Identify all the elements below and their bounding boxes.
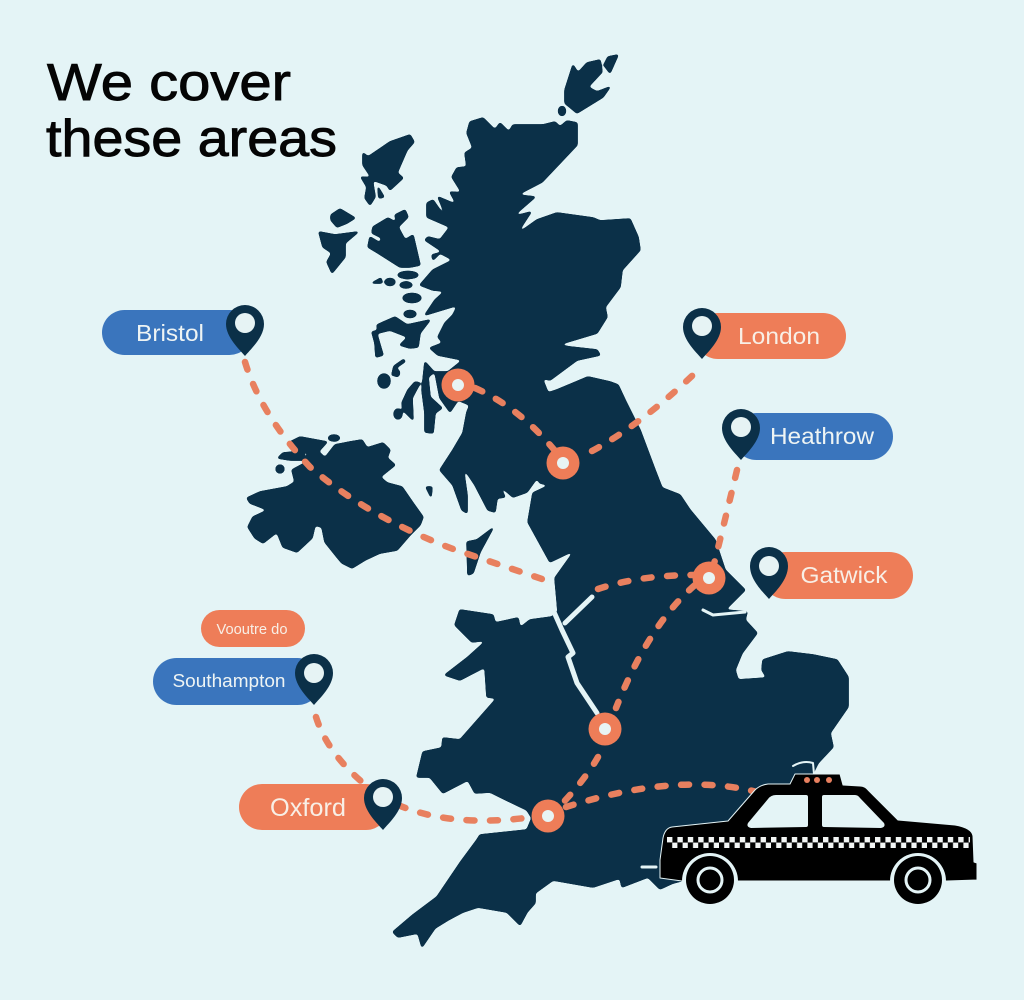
- small label: [201, 610, 305, 647]
- location label: Bristol: [102, 305, 264, 356]
- Isle of Man: [467, 528, 493, 575]
- location label: Bristol: Bristol: [136, 320, 204, 346]
- location label: Southampton: [153, 654, 333, 705]
- taxi roof lights: [804, 777, 832, 783]
- dashed routes: [245, 362, 757, 821]
- Ireland: [247, 437, 423, 568]
- taxi windows: [747, 795, 885, 828]
- location label: London: London: [738, 323, 820, 349]
- location label: Gatwick: [750, 547, 913, 599]
- small label: Vooutre do: [216, 621, 288, 638]
- estuaries and river channels: [554, 597, 814, 867]
- map of the UK and Ireland: [247, 55, 848, 947]
- taxi body: [660, 774, 977, 881]
- taxi rear wheel: [890, 853, 946, 904]
- taxi checker stripe: [667, 837, 970, 848]
- location label: Heathrow: [722, 409, 893, 460]
- location label: Heathrow: Heathrow: [770, 423, 874, 449]
- location label: Oxford: Oxford: [270, 794, 346, 822]
- Skye: [368, 210, 420, 267]
- title: these areas: [46, 110, 337, 168]
- location label: Gatwick: Gatwick: [800, 562, 888, 588]
- western isles: [319, 209, 358, 273]
- Great Britain mainland: [393, 118, 848, 947]
- icon: taxi: [660, 774, 977, 904]
- route nodes: [442, 368, 726, 832]
- Outer Hebrides: [361, 135, 414, 205]
- Inner Hebrides: [372, 278, 442, 497]
- Shetland: [565, 55, 618, 113]
- location label: London: [683, 308, 846, 359]
- title: [46, 54, 337, 168]
- taxi front wheel: [682, 853, 738, 904]
- location label: Southampton: Southampton: [172, 671, 286, 691]
- location label: Oxford: [239, 779, 402, 830]
- title: We cover: [47, 54, 291, 112]
